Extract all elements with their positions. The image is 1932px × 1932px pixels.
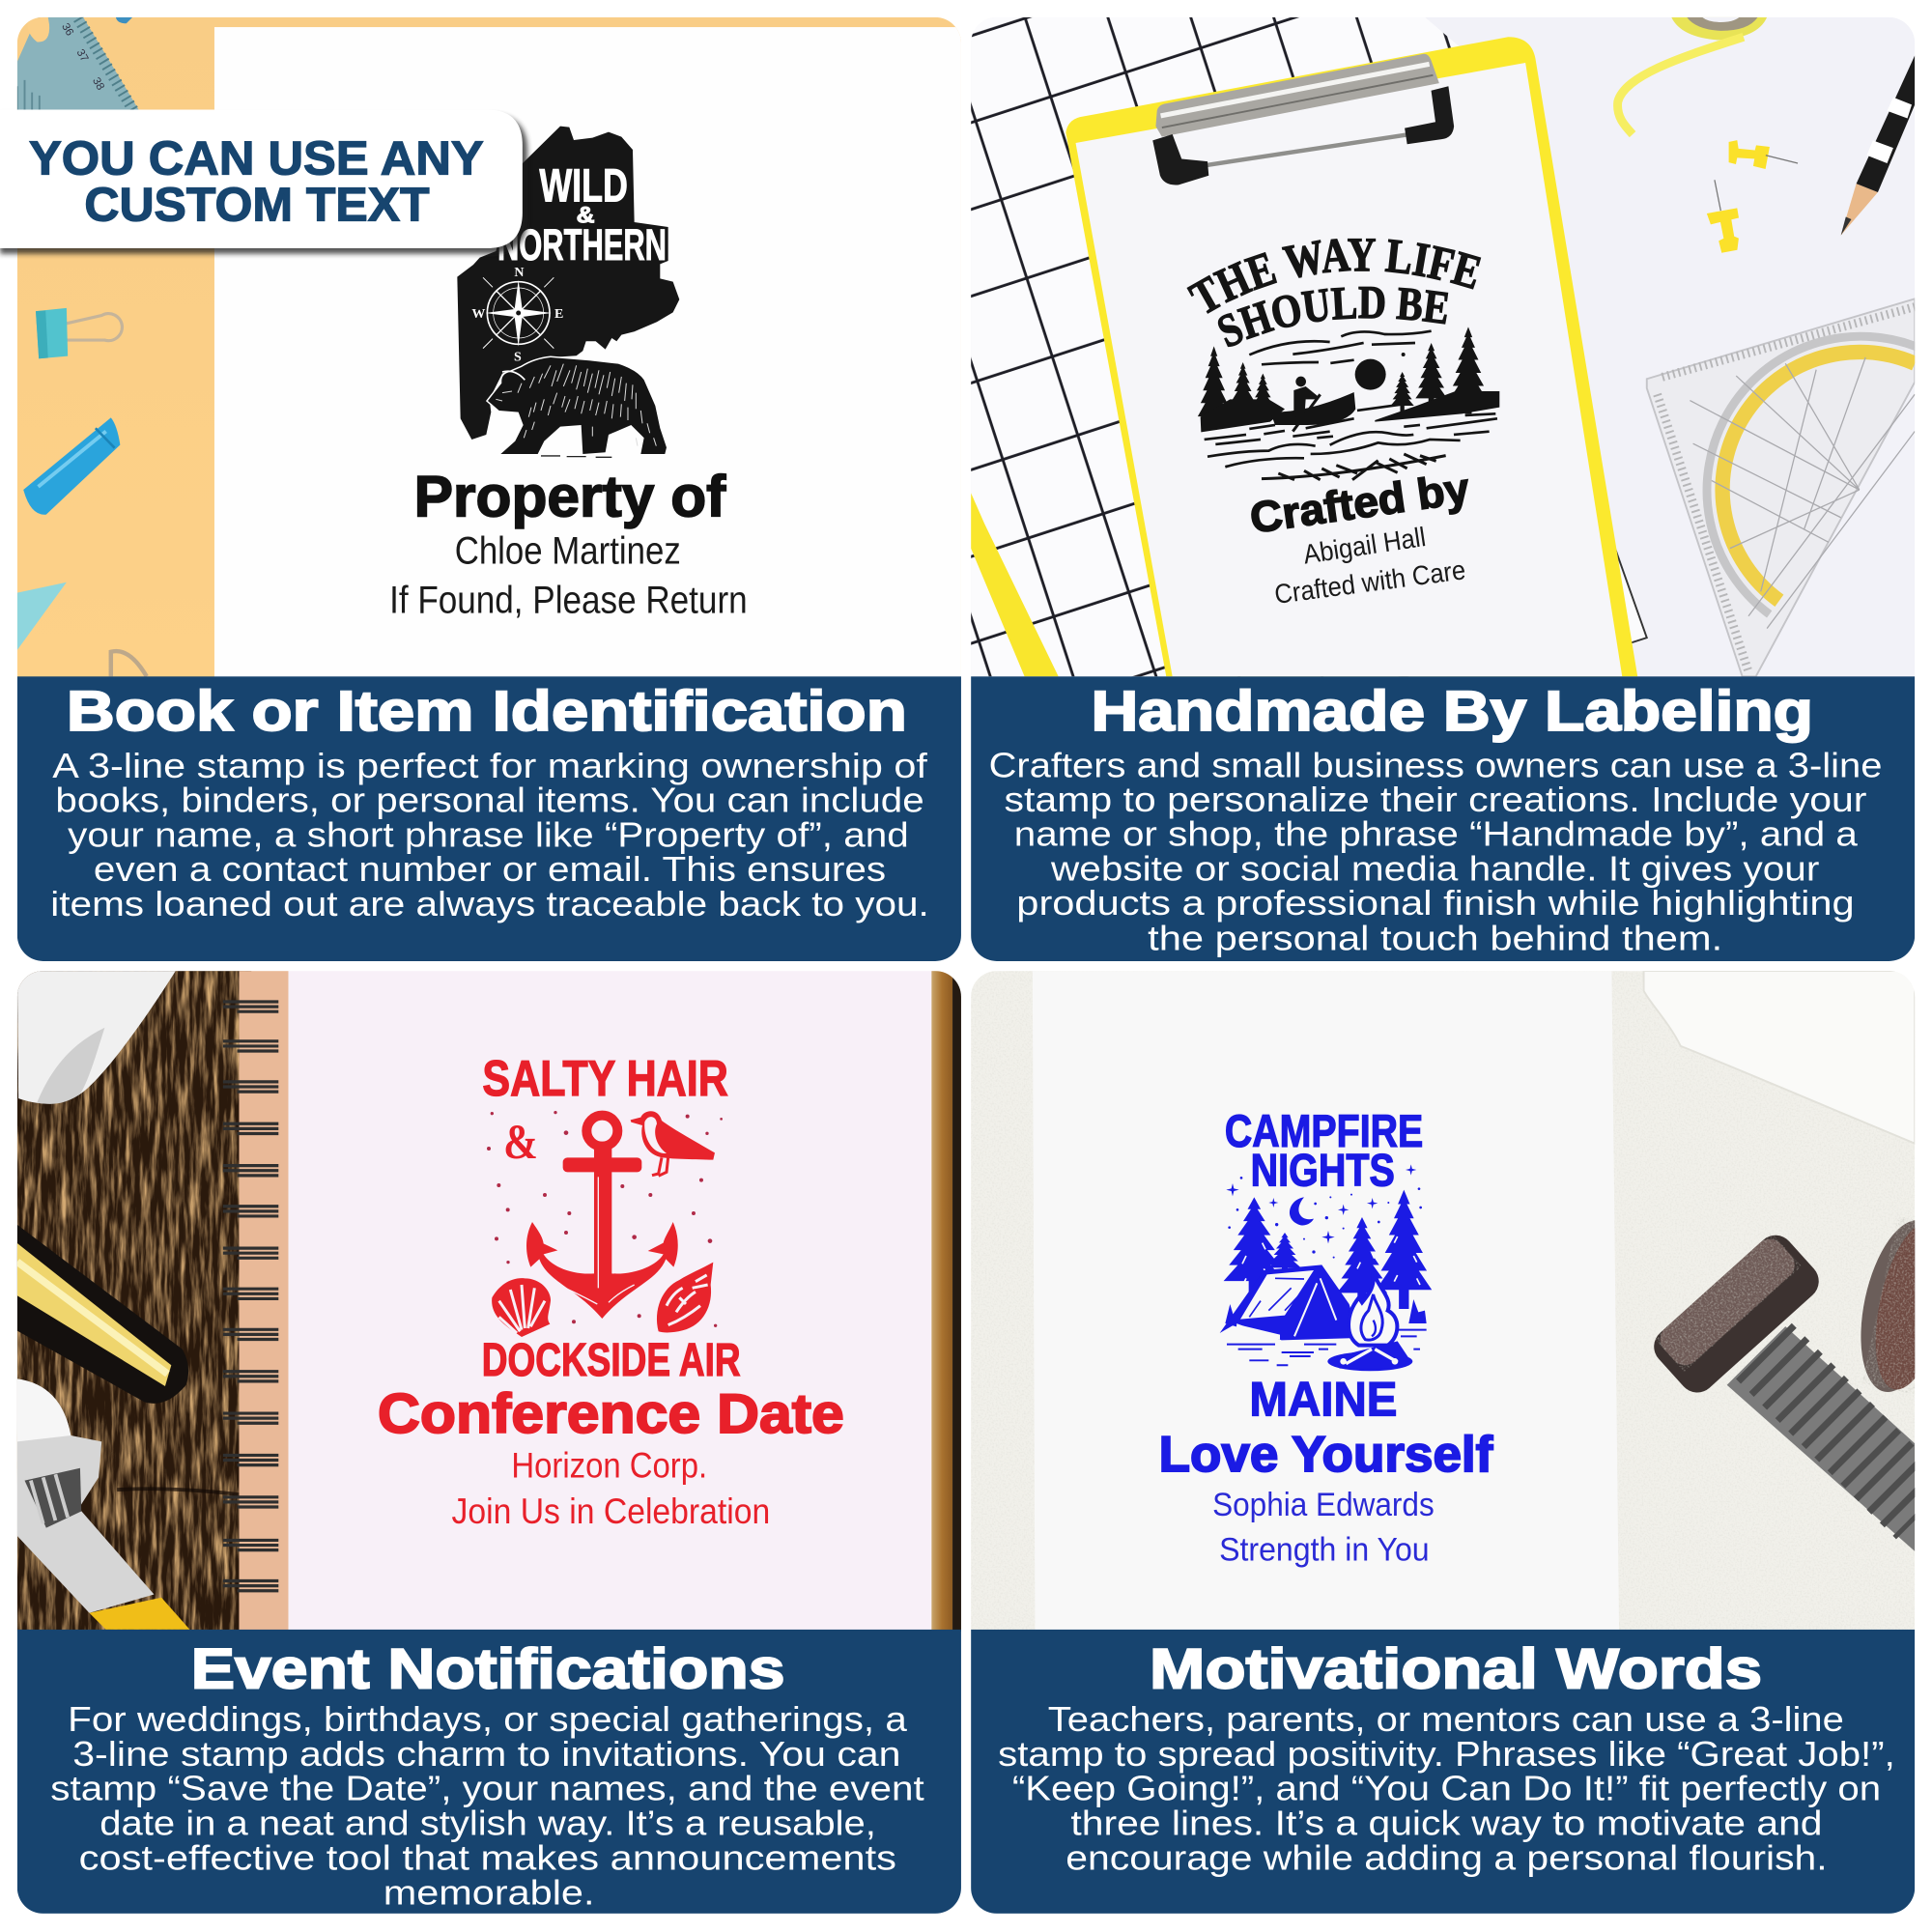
stamp text: Sophia Edwards	[1212, 1487, 1435, 1523]
map text	[497, 159, 667, 270]
tape roll	[1618, 17, 1767, 134]
stars	[1226, 1164, 1422, 1259]
pencil	[1841, 55, 1915, 236]
body text: items loaned out are always traceable back to you.	[50, 885, 929, 923]
stamp text: CAMPFIRE	[1225, 1106, 1423, 1157]
icon: ruler: 36	[59, 21, 75, 38]
icon: branch	[1262, 454, 1446, 480]
body text	[989, 746, 1882, 957]
caption band	[971, 676, 1915, 966]
dark marker	[17, 1225, 188, 1404]
stamp text: NIGHTS	[1251, 1146, 1395, 1197]
icon: compass: N	[514, 266, 524, 280]
far bolt	[1861, 1217, 1915, 1394]
second clipboard edge	[971, 493, 1059, 676]
icon: conch shell	[657, 1263, 713, 1332]
icon: binder clip	[36, 308, 122, 358]
icon: sun	[1355, 359, 1386, 390]
icon: crescent moon	[1290, 1197, 1314, 1225]
photo: notebook on wooden table	[17, 971, 962, 1914]
body text: the personal touch behind them.	[1148, 919, 1722, 957]
body text	[50, 747, 929, 923]
spiral binding	[223, 1002, 278, 1591]
grid paper	[971, 17, 1647, 676]
stamp text: name: Abigail Hall	[1301, 522, 1428, 570]
body text: date in a neat and stylish way. It’s a reusable,	[99, 1804, 876, 1842]
stamp text: crafted by: Crafted by	[1247, 465, 1472, 543]
wrench	[17, 1378, 189, 1630]
ground lines	[1227, 1330, 1427, 1365]
stamp text	[1159, 1106, 1493, 1568]
stamp text: Join Us in Celebration	[452, 1492, 770, 1531]
cloth	[17, 971, 176, 1104]
icon: canoe with paddler	[1270, 377, 1355, 432]
stamp text: tagline: Crafted with Care	[1273, 554, 1467, 610]
icon: anchor	[526, 1116, 678, 1319]
arched title: THE WAY LIFE	[1186, 238, 1482, 314]
icon: ruler: 38	[90, 75, 106, 92]
map text: NORTHERN	[497, 220, 667, 270]
icon: compass: S	[514, 350, 522, 364]
stamp art: Maine map with bear	[457, 127, 679, 457]
icon: paper plane	[17, 582, 67, 650]
body text: encourage while adding a personal flourish.	[1065, 1839, 1828, 1878]
body text: three lines. It’s a quick way to motivate and	[1070, 1804, 1823, 1842]
panel: event notifications	[17, 971, 962, 1914]
body text: Crafters and small business owners can use a 3-line	[989, 746, 1882, 784]
body text: even a contact number or email. This ensures	[94, 850, 886, 889]
shoreline	[1201, 391, 1499, 432]
caption band	[17, 676, 961, 966]
white paper	[1033, 971, 1619, 1632]
body text: name or shop, the phrase “Handmade by”, and a	[1014, 815, 1858, 854]
panel: handmade by labeling	[971, 17, 1915, 961]
body text	[998, 1700, 1895, 1878]
body text: products a professional finish while highlighting	[1016, 884, 1855, 923]
body text: stamp to personalize their creations. Include your	[1005, 781, 1867, 819]
near bolt shaft	[1727, 1326, 1924, 1551]
notebook cover	[931, 971, 952, 1632]
near bolt head	[1654, 1233, 1819, 1393]
body text: “Keep Going!”, and “You Can Do It!” fit perfectly on	[1012, 1770, 1881, 1808]
stamp text: Conference Date	[378, 1383, 844, 1445]
icon: campfire	[1327, 1272, 1412, 1371]
towel	[1644, 971, 1915, 1144]
stamp text: return line: If Found, Please Return	[389, 580, 748, 622]
body text	[50, 1700, 924, 1912]
water and sky lines	[1205, 331, 1497, 467]
map text: &	[577, 203, 595, 229]
protractor	[1647, 298, 1923, 676]
stamp text: property of: Property of	[414, 464, 726, 528]
arched title: SHOULD BE	[1217, 286, 1449, 348]
photo: desk with yellow background and white paper	[17, 17, 962, 966]
body text: Teachers, parents, or mentors can use a 3-line	[1048, 1700, 1844, 1739]
clipboard	[1065, 37, 1637, 676]
body text: your name, a short phrase like “Property of”, and	[68, 815, 909, 854]
icon: tent	[1220, 1264, 1359, 1340]
stamp art: canoe on a lake	[1186, 238, 1499, 481]
icon: blue pen cap	[23, 417, 120, 515]
photo: white paper with bolts on stone	[971, 971, 1932, 1914]
notebook edge	[239, 971, 288, 1632]
icon: grass tufts	[1225, 1299, 1427, 1326]
panel: book or item identification	[0, 17, 962, 966]
body text: For weddings, birthdays, or special gatherings, a	[68, 1700, 907, 1739]
stamp art: campsite with tent and fire	[1220, 1164, 1432, 1371]
body text: A 3-line stamp is perfect for marking ownership of	[52, 747, 927, 785]
stamp text: &	[503, 1116, 538, 1170]
body text: stamp “Save the Date”, your names, and the event	[50, 1770, 924, 1808]
scattered dots	[487, 1111, 723, 1327]
heading: Motivational Words	[1150, 1638, 1762, 1701]
arched title	[1186, 238, 1482, 348]
clipboard paper	[1076, 63, 1622, 676]
stamp text: name: Chloe Martinez	[455, 530, 681, 573]
icon: ring	[111, 651, 147, 676]
icon: compass: W	[471, 307, 485, 322]
map text: WILD	[539, 159, 628, 212]
trees	[1198, 327, 1488, 430]
photo: yellow clipboard on white desk	[971, 17, 1923, 966]
stamp text	[378, 1051, 844, 1531]
body text: books, binders, or personal items. You can include	[55, 781, 924, 820]
icon: compass: E	[554, 307, 563, 322]
stamp text: Strength in You	[1219, 1531, 1430, 1568]
callout: you can use any custom text: CUSTOM TEXT	[84, 179, 430, 231]
callout: you can use any custom text: YOU CAN USE ANY	[29, 132, 484, 185]
panel: motivational words	[971, 971, 1932, 1914]
map silhouette	[457, 127, 679, 440]
caption band	[971, 1630, 1915, 1914]
body text: website or social media handle. It gives your	[1050, 849, 1819, 888]
heading: Book or Item Identification	[67, 680, 907, 743]
icon: seagull	[631, 1111, 715, 1176]
stamp art: anchor with gull and shells	[487, 1111, 723, 1337]
body text: 3-line stamp adds charm to invitations. You can	[72, 1735, 900, 1774]
icon: bear	[488, 357, 667, 457]
callout: you can use any custom text	[0, 110, 527, 254]
stamp text: DOCKSIDE AIR	[482, 1334, 741, 1386]
push pins	[1709, 142, 1798, 251]
stamp text: MAINE	[1249, 1373, 1397, 1427]
trees	[1224, 1190, 1432, 1309]
caption band	[17, 1630, 961, 1914]
body text: stamp to spread positivity. Phrases like “Great Job!”,	[998, 1735, 1895, 1774]
icon: compass	[471, 266, 563, 364]
heading: Handmade By Labeling	[1091, 680, 1813, 743]
notebook page	[288, 971, 935, 1632]
icon: ruler	[17, 17, 139, 111]
metal clip	[1152, 54, 1454, 185]
icon: ruler: 37	[73, 47, 90, 64]
stamp text: SALTY HAIR	[482, 1051, 728, 1107]
heading: Event Notifications	[191, 1638, 785, 1701]
stamp text: Love Yourself	[1159, 1427, 1493, 1483]
body text: memorable.	[384, 1873, 594, 1912]
icon: scallop shell	[492, 1278, 551, 1337]
body text: cost-effective tool that makes announcements	[79, 1839, 896, 1878]
stamp text: Horizon Corp.	[511, 1445, 707, 1485]
